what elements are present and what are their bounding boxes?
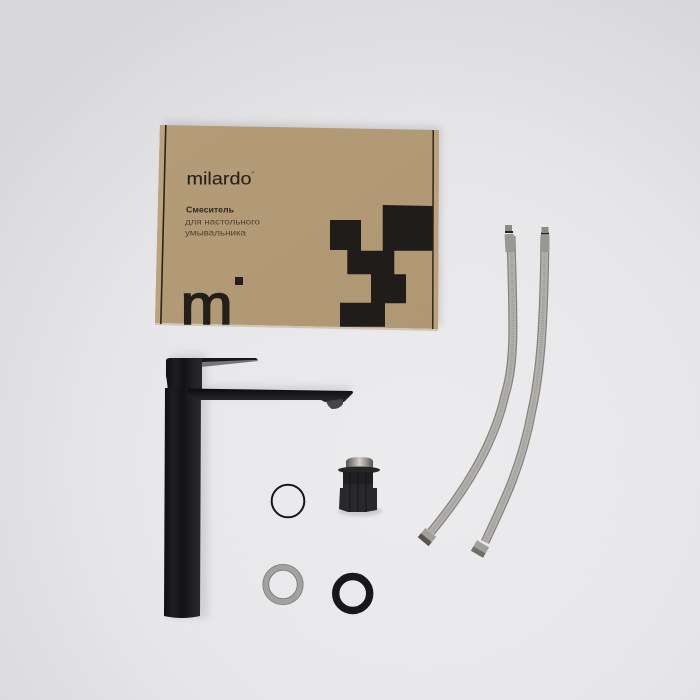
box product title: Смеситель [186, 206, 234, 214]
drain body [343, 472, 373, 488]
drain threaded base [339, 484, 377, 512]
drain flange [338, 466, 380, 474]
box monogram: m [180, 273, 233, 336]
box logotype: milardo [186, 168, 252, 188]
black washer [336, 576, 370, 610]
braided hoses [418, 225, 549, 558]
hose 1 [418, 225, 513, 546]
drain chrome top [346, 457, 373, 469]
box black pattern [330, 205, 433, 327]
hose 2 nut [471, 540, 489, 558]
rubber o-ring [272, 485, 304, 517]
hose 1 nut [418, 528, 436, 546]
box product subtitle: для настольного [185, 218, 261, 226]
faucet [164, 354, 353, 618]
box product subtitle [185, 218, 261, 238]
faucet aerator [326, 399, 343, 409]
box product subtitle: умывальника [185, 228, 247, 238]
drain flutes [350, 474, 366, 512]
faucet handle cylinder [166, 358, 202, 392]
hose 2 [471, 227, 549, 558]
faucet lever [195, 358, 258, 367]
registered mark: ® [252, 170, 254, 175]
product box [155, 121, 441, 336]
metal washer [263, 564, 303, 605]
faucet spout [188, 388, 353, 402]
faucet body [164, 388, 201, 618]
drain insert [338, 457, 382, 516]
